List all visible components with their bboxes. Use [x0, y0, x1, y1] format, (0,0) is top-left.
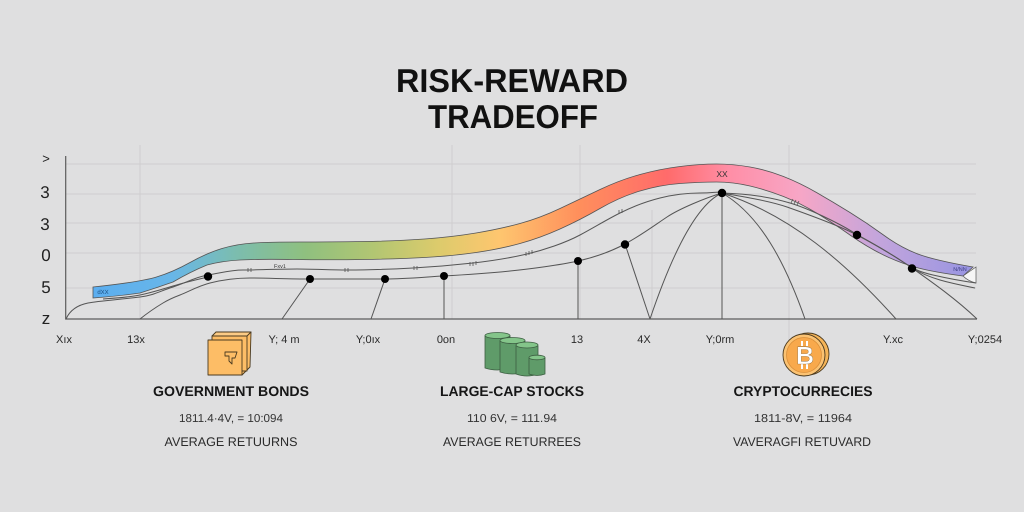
- x axis labels: 0on: [437, 334, 455, 346]
- panel: government bonds: GOVERNMENT BONDS: [153, 383, 309, 399]
- ribbon labels: [97, 169, 967, 296]
- icon: bitcoin coin: B: [796, 342, 814, 370]
- x axis labels: 4X: [637, 334, 651, 346]
- y axis labels: 3: [40, 183, 50, 202]
- y axis labels: 0: [41, 246, 51, 265]
- ribbon labels: N/NN: [953, 267, 967, 273]
- risk-reward ribbon curve: [93, 164, 973, 298]
- data points: [204, 189, 916, 283]
- panel: government bonds: [153, 383, 309, 449]
- x axis labels: Y.xc: [883, 334, 903, 346]
- panel: government bonds: AVERAGE RETUURNS: [164, 435, 298, 449]
- title: TRADEOFF: [428, 98, 598, 135]
- panel: cryptocurrencies: CRYPTOCURRECIES: [734, 383, 872, 399]
- y axis labels: >: [42, 151, 50, 166]
- icon: government bonds document stack: [208, 332, 251, 375]
- panel: government bonds: 1811.4·4V, = 10:094: [179, 413, 284, 425]
- y axis labels: z: [42, 309, 50, 328]
- ribbon labels: Fxv1: [274, 264, 286, 270]
- y axis labels: [40, 151, 51, 328]
- x axis labels: 13: [571, 334, 583, 346]
- title: [396, 62, 628, 135]
- x axis labels: 13x: [127, 334, 145, 346]
- x axis labels: Xıx: [56, 334, 72, 346]
- icon: bitcoin coin: [783, 333, 829, 376]
- connecting curves: [66, 192, 977, 319]
- ribbon labels: dXX: [97, 289, 109, 296]
- panel: cryptocurrencies: 1811-8V, = 11964: [754, 413, 853, 425]
- icon: large-cap stocks cylinders: [485, 332, 545, 376]
- ribbon labels: XX: [716, 169, 728, 179]
- panel: large-cap stocks: 110 6V, = 111.94: [467, 413, 558, 425]
- panel: cryptocurrencies: [733, 383, 872, 449]
- x axis labels: Y; 4 m: [268, 334, 300, 346]
- x axis labels: Y;0rm: [706, 334, 734, 346]
- panel: large-cap stocks: AVERAGE RETURREES: [443, 435, 581, 449]
- title: RISK-REWARD: [396, 62, 628, 99]
- panel: large-cap stocks: [440, 383, 584, 449]
- x axis labels: [56, 334, 1002, 346]
- x axis labels: Y;0ıx: [356, 334, 381, 346]
- panel: cryptocurrencies: VAVERAGFI RETUVARD: [733, 435, 871, 449]
- curve tick marks: [248, 199, 799, 272]
- x axis labels: Y;0254: [968, 334, 1002, 346]
- ribbon fold: [963, 267, 976, 283]
- y axis labels: 3: [40, 215, 50, 234]
- panel: large-cap stocks: LARGE-CAP STOCKS: [440, 383, 584, 399]
- y axis labels: 5: [41, 278, 51, 297]
- axes: [66, 156, 977, 319]
